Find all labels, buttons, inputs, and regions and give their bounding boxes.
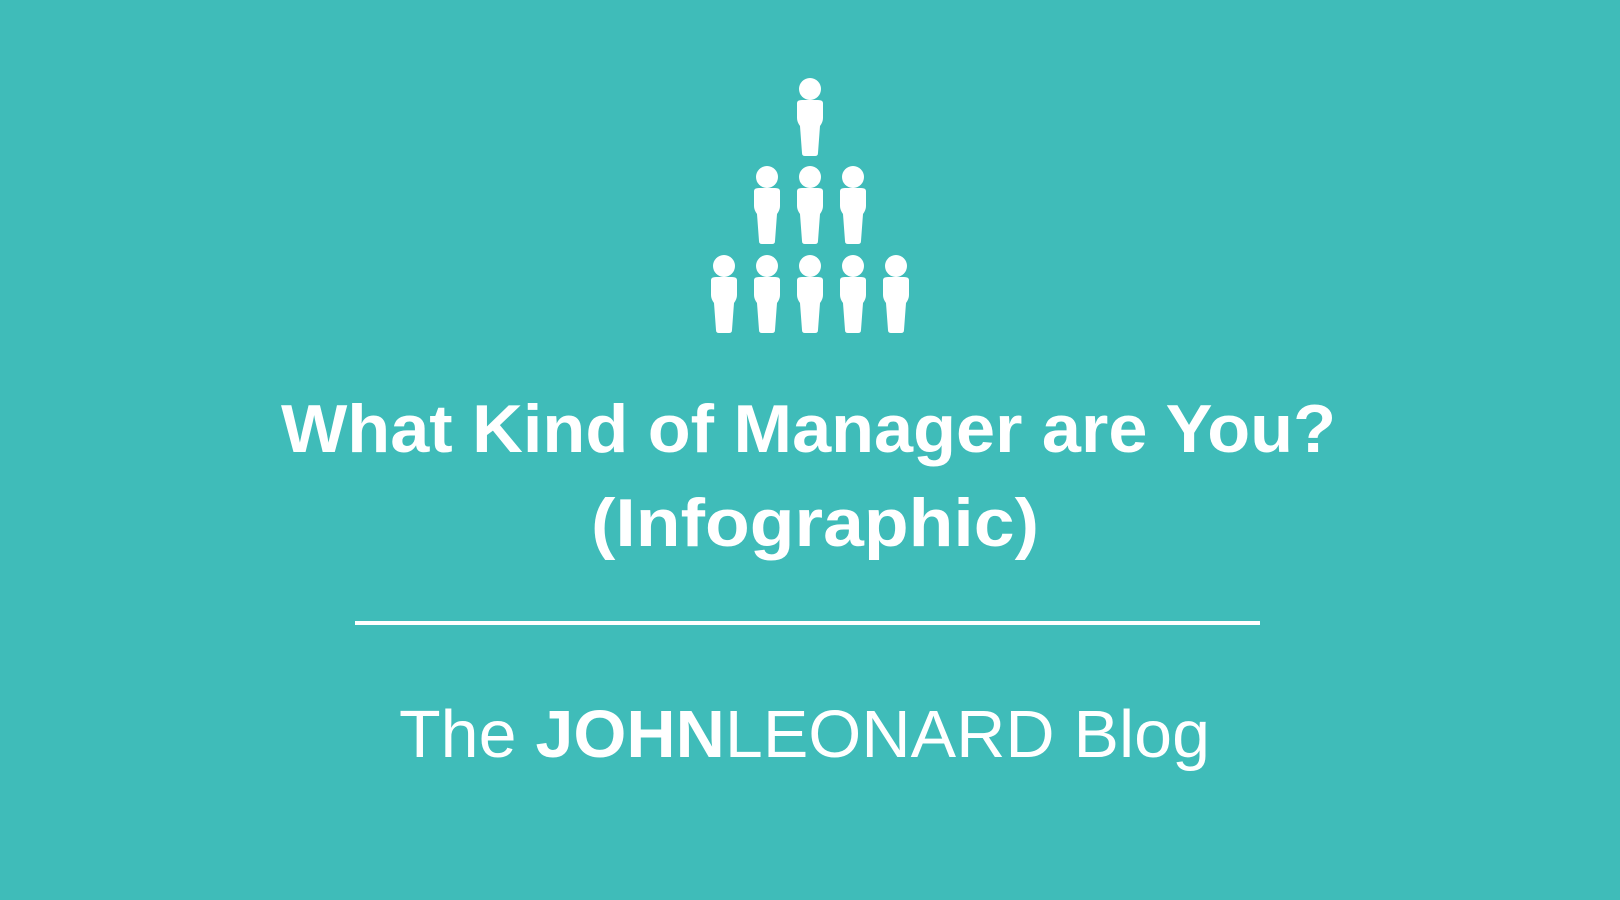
blog name: The JOHNLEONARD Blog bbox=[399, 697, 1210, 772]
title: (Infographic) bbox=[591, 485, 1039, 561]
icon: pyramid of people bbox=[711, 78, 909, 333]
title bbox=[281, 391, 1336, 561]
title: What Kind of Manager are You? bbox=[281, 391, 1336, 467]
divider line bbox=[355, 621, 1260, 625]
